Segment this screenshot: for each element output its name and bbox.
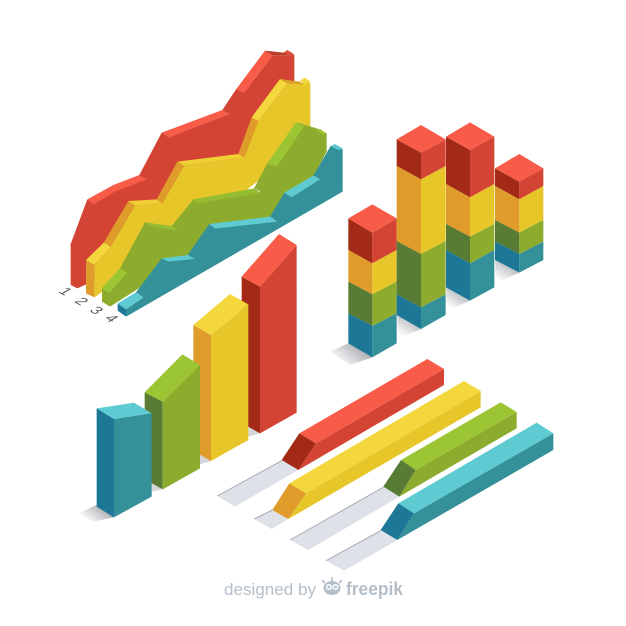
- red bar: [242, 234, 297, 433]
- axis labels 1 to 4: 2: [70, 295, 92, 308]
- green bar: [145, 354, 200, 489]
- chart: isometric vertical bars: [78, 234, 297, 522]
- area layer 2: yellow: [86, 78, 310, 297]
- column B: [397, 125, 446, 329]
- footer: freepik credit: [224, 577, 404, 599]
- chart: isometric layered area chart: [71, 50, 343, 317]
- brand name: freepik: [346, 579, 404, 599]
- axis labels 1 to 4: 4: [100, 312, 122, 325]
- red horizontal bar: [217, 359, 444, 507]
- teal horizontal bar: [326, 423, 553, 571]
- chart: stacked isometric columns: [330, 122, 543, 365]
- chart: isometric horizontal bars: [217, 359, 553, 571]
- column C: [446, 122, 494, 301]
- axis labels 1 to 4: [54, 285, 122, 325]
- axis labels 1 to 4: 1: [54, 285, 76, 298]
- credit text: designed by: [224, 580, 316, 599]
- teal bar: [97, 403, 152, 517]
- column D: [495, 154, 543, 273]
- area layer 3: green: [102, 122, 327, 307]
- column shadows: [330, 260, 519, 365]
- green horizontal bar: [290, 402, 517, 550]
- icon: freepik mascot: [322, 577, 342, 595]
- yellow horizontal bar: [254, 381, 481, 529]
- axis labels 1 to 4: 3: [85, 304, 107, 317]
- column A: [348, 204, 397, 357]
- yellow bar: [193, 294, 248, 461]
- area layer 1: red: [71, 50, 294, 288]
- bar shadows: [78, 425, 260, 522]
- area layer 4: teal: [118, 144, 343, 317]
